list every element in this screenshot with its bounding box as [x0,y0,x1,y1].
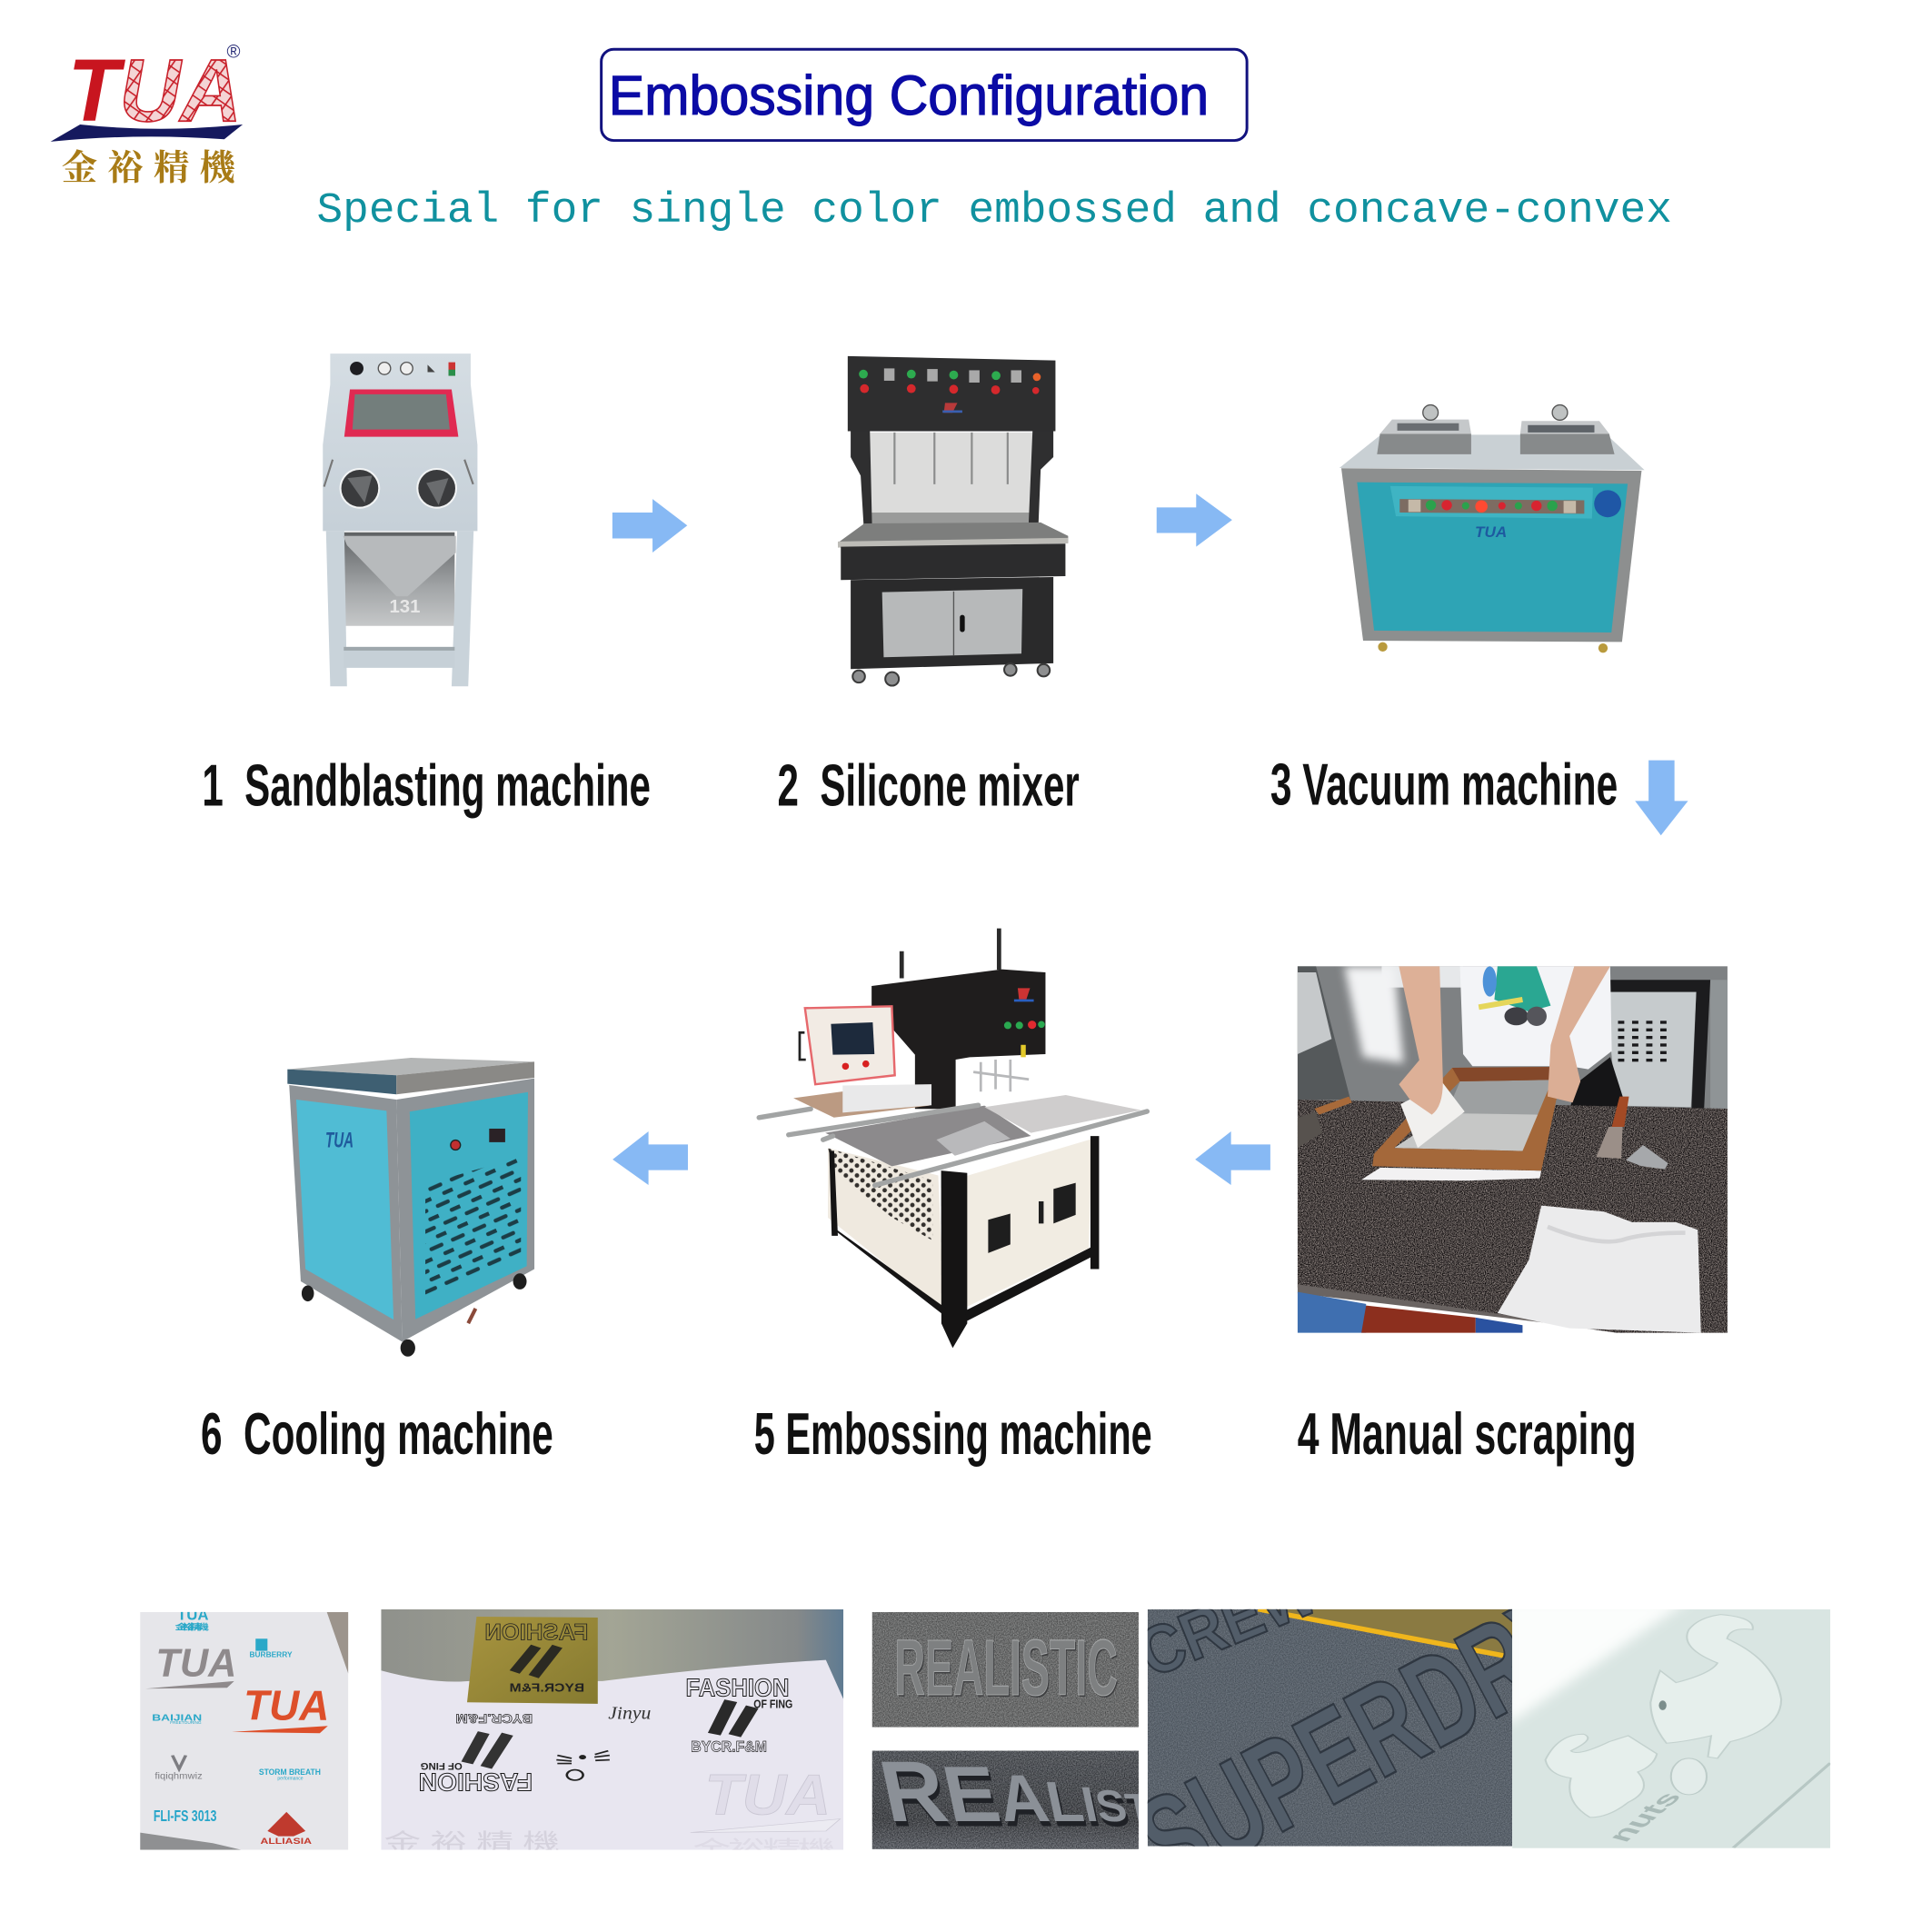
left arm [1399,966,1443,1115]
wheels [1378,642,1608,652]
top white strip [1381,966,1463,988]
plate mirrored text: FASHION [484,1620,588,1645]
press clamps [973,1060,1029,1091]
grey TUA: TUA [155,1641,236,1685]
panel logo: TUA [1475,524,1507,541]
photo: manual scraping [1298,966,1728,1333]
fabric grain [872,1612,1139,1728]
round blue badge [1594,490,1621,517]
left upside-down FASHION: FASHION [419,1768,533,1797]
steel scraper [1298,1111,1322,1148]
logo Chinese name: 金裕精機 [62,148,237,188]
vent slots [1618,1021,1667,1061]
grey fabric [872,1612,1139,1728]
title box [602,49,1247,141]
metal backdrop [381,1609,843,1700]
cabinet left face [289,1085,403,1342]
right BYCR: BYCR.F&M [691,1738,767,1755]
right OF FING: OF FING [753,1698,792,1710]
stitch line [1734,1763,1830,1847]
castor wheels [852,663,1050,686]
plate slanted mark [514,1647,557,1677]
cabinet right face [396,1079,534,1342]
arrow right 2 [1157,493,1232,547]
red triangle badge [267,1812,305,1837]
brown corner [1258,1609,1512,1658]
window glass [353,394,450,430]
shirt print [1479,966,1550,1026]
left teal panel [296,1100,393,1320]
paste patch [1626,1145,1668,1170]
steel trays [825,1095,1141,1166]
right arm [1548,966,1610,1102]
slide rails [759,1105,1147,1185]
denim grain [872,1751,1139,1849]
gold plate [467,1617,598,1704]
stainless table top [838,523,1068,547]
alliasia: ALLIASIA [260,1837,312,1847]
embossed word: nuts [1600,1789,1688,1845]
cabinet doors [882,589,1022,657]
grey cabinet panel left [1298,972,1331,1054]
plate lower mirrored text: BYCR.F&M [510,1681,584,1694]
sample photo C: REALISTIC flat [872,1612,1139,1728]
gauges and switch [350,362,455,376]
small brand left: BAIJIAN [152,1712,202,1723]
right black frame [1604,980,1710,1109]
sample photo E: debossed lettering on slate fabric [1116,1551,1608,1917]
tagline left: FREETOURING [170,1720,202,1725]
REALISTIC: REALISTIC [894,1624,1118,1712]
room background [1298,966,1728,1111]
sample photo D: REALISTIC perspective [872,1744,1192,1849]
vacuum chambers [1377,420,1615,454]
red item under table [1361,1306,1476,1333]
grey band [145,1681,234,1688]
cabinet legs and hopper back [326,531,473,686]
embossed Chinese right: 金裕精機 [692,1830,835,1866]
logo: TUA brand mark [51,41,243,188]
granite table [1298,1100,1728,1333]
logo navy band [51,124,243,142]
arrow right 1 [612,499,687,553]
REALISTIC shadow: REALISTIC [896,1626,1119,1714]
cabinet left side [828,1148,944,1311]
big squirrel eye [1658,1700,1667,1710]
hopper [344,536,456,596]
yellow edge [1258,1609,1512,1658]
frame interior upper [1446,1080,1550,1115]
body frame [1341,468,1641,642]
acorn [1671,1758,1707,1795]
press pillars [901,929,999,979]
cabinet front [959,1139,1091,1310]
bottom mark: 131 [389,597,420,617]
label 4: 4 Manual scraping [1298,1400,1637,1467]
fabric [140,1612,348,1850]
red TUA: TUA [244,1682,329,1729]
control strip [1399,499,1584,513]
table front strip [1298,1284,1617,1331]
signature: Jinyu [608,1703,651,1723]
performance: performance [277,1777,304,1781]
denim fabric [872,1751,1139,1849]
back shelf [870,513,1032,527]
right FASHION: FASHION [686,1674,790,1702]
white fabric [381,1660,843,1850]
cat face [556,1751,610,1780]
logo wordmark: TUA [68,41,242,140]
top surface [1339,434,1645,470]
black press head [871,970,1045,1109]
perspective text shadow: REALISTIC [874,1748,1192,1845]
machine 1: sandblasting cabinet [323,354,477,686]
cabinet vents [988,1183,1076,1253]
perforated section [828,1148,932,1240]
black band [841,543,1065,580]
drain valve [468,1309,475,1323]
wooden frame [1372,1067,1563,1170]
title frame [602,49,1247,141]
small squirrel [1546,1734,1657,1817]
left upside-down OF FING: OF FING [421,1760,463,1771]
sample photo F: embossed squirrels [1500,1602,1830,1848]
grey rabbit icon [173,1756,185,1769]
corner background [327,1612,348,1674]
top front right edge [396,1061,534,1094]
small rear tray [793,1086,930,1118]
frame interior lower [1394,1113,1541,1151]
control box [805,1006,895,1084]
steel top [287,1058,534,1075]
slate fabric [1148,1609,1512,1847]
machine 3: vacuum machine [1339,405,1645,652]
teal front panel [1357,483,1628,632]
glove holes [340,468,457,509]
table edge [838,538,1068,548]
big squirrel [1650,1615,1781,1758]
t-shirt [1460,966,1612,1070]
white cloth [1498,1206,1701,1333]
top Chinese cyan: 金裕精機 [174,1620,209,1632]
fabric grain [1148,1609,1512,1847]
embossed Chinese left: 金裕精機 [383,1823,560,1857]
cabinet body [323,354,477,531]
back panel [870,433,1032,513]
arrow down [1635,761,1688,835]
ventilation slots [425,1157,521,1300]
sample photo A: printed logos on white fabric [140,1606,348,1850]
registered mark: ® [226,43,240,63]
arrow left 2 [1195,1131,1270,1185]
side pillars [851,432,1053,539]
embossed band [691,1819,840,1833]
lower body [851,577,1053,669]
vacuum gauges [1423,405,1568,420]
crate under table [1298,1292,1366,1333]
left upside-down mark [467,1733,507,1768]
strip buttons [1409,500,1576,513]
red band [232,1726,328,1733]
embossed TUA: TUA [704,1763,831,1827]
right teal panel [410,1092,528,1320]
main debossed text: SUPERDRY [1116,1563,1608,1917]
top logo cyan: TUA [177,1606,209,1623]
right slanted mark [714,1701,752,1736]
perspective text: REALISTIC [872,1744,1190,1840]
power button and display [451,1129,505,1150]
top front left edge [287,1070,396,1094]
control recess [1390,486,1593,519]
knife blade [1596,1127,1623,1159]
sample photo B: badge and embossed fabric [381,1609,843,1866]
bottom background [140,1833,242,1850]
burberry icon [255,1638,267,1651]
machine 5: embossing machine [759,929,1147,1348]
right machine panel [1606,992,1697,1107]
squeegee [1400,1083,1465,1148]
panel logo: TUA [325,1128,354,1152]
burberry: BURBERRY [249,1651,293,1659]
frame top bar shade [1452,1067,1563,1081]
machine 2: silicone mixer [838,356,1068,686]
control box buttons and handle [800,1032,870,1070]
subtitle: Special for single color embossed and concave-convex [316,186,1672,235]
cloth fold [1548,1227,1686,1241]
label 6: 6 Cooling machine [201,1400,553,1467]
white corner [1500,1602,1686,1729]
left upside-down BYCR: BYCR.F&M [455,1712,533,1727]
cabinet frame [829,1136,1099,1348]
label 1: 1 Sandblasting machine [202,752,651,819]
red handle knife [1612,1097,1629,1127]
trousers [1569,1057,1623,1109]
white cylinder unit [842,1084,931,1112]
floor reflection [1344,966,1404,1063]
grey script: fiqiqhmwiz [154,1770,203,1781]
label 2: 2 Silicone mixer [778,752,1080,819]
white strip under frame [1361,1168,1541,1180]
dispensing rods [894,433,1008,484]
dark cabinet left [1298,966,1350,1100]
sample photo A: printed logos on white fabric: FLI-FS 3013 [154,1807,216,1825]
right floor [1710,980,1728,1109]
panel buttons and meters [859,368,1041,413]
castors [302,1273,526,1357]
red window frame [344,389,458,437]
arrow left 1 [612,1131,688,1185]
control panel [848,356,1055,432]
touchscreen [831,1022,874,1055]
head buttons [1004,988,1045,1057]
label 5: 5 Embossing machine [754,1400,1152,1467]
machine 6: cooling machine [287,1058,534,1357]
label 3: 3 Vacuum machine [1270,751,1618,817]
wood stick [1314,1097,1352,1115]
pale fabric [1512,1609,1830,1848]
side handles [324,460,473,487]
storm breath: STORM BREATH [259,1768,321,1778]
blue under table [1476,1318,1522,1333]
upper debossed text: CREW [1128,1551,1328,1692]
title text: Embossing Configuration [609,65,1209,126]
